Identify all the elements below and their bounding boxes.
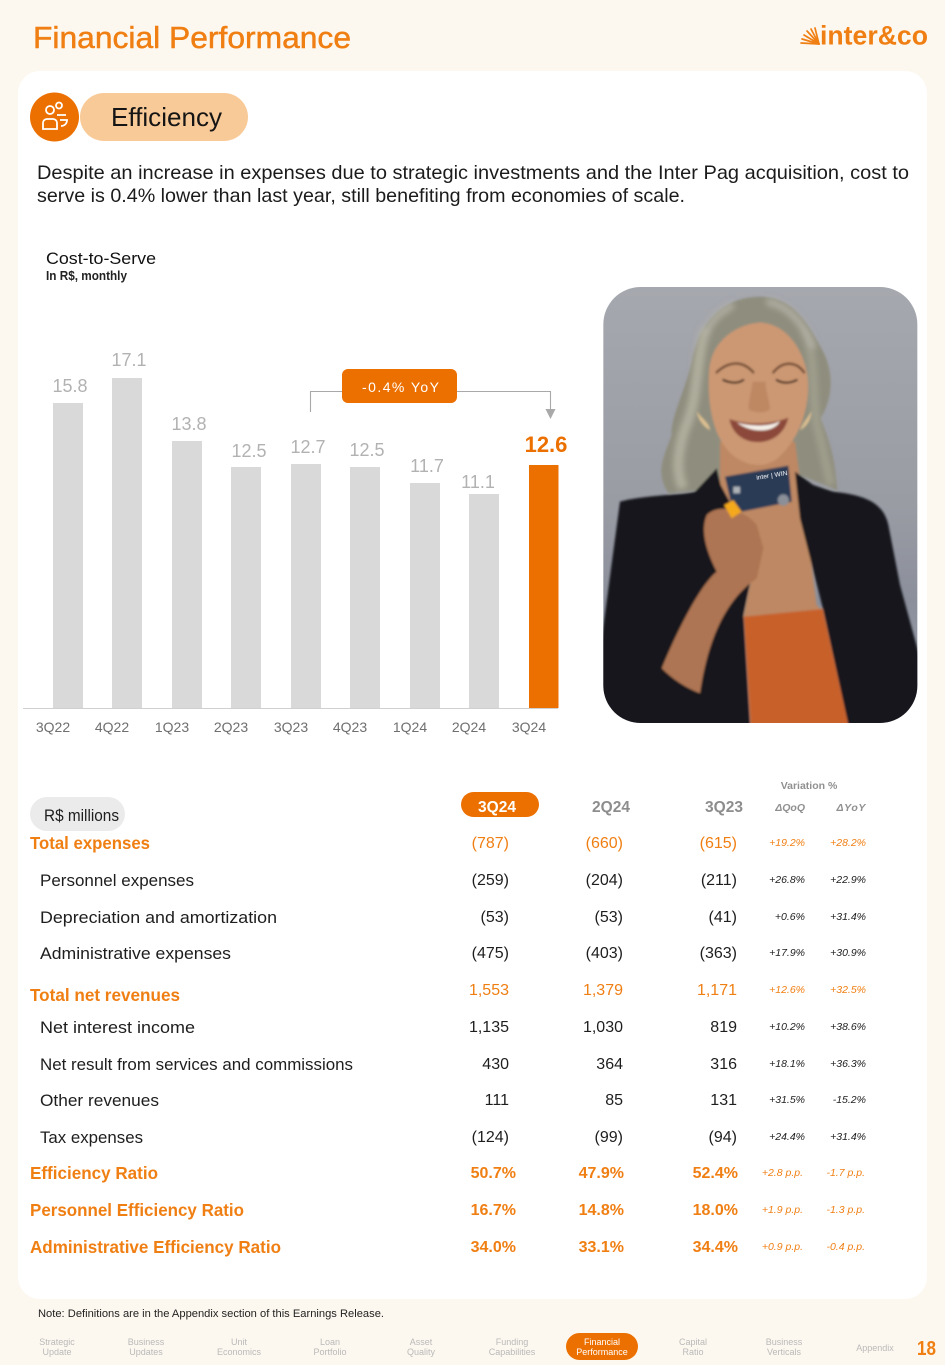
table: financial rows: Other revenues [40, 1091, 159, 1110]
table: financial rows: (363) [700, 945, 737, 962]
intro text: serve is 0.4% lower than last year, still benefiting from economies of scale. [37, 185, 685, 207]
table: financial rows: 1,553 [469, 982, 509, 999]
bar chart: cost to serve: 2Q24 [452, 719, 486, 735]
table: financial rows: (53) [595, 909, 623, 926]
table: financial rows: (660) [586, 835, 623, 852]
table: financial rows: (403) [586, 945, 623, 962]
table: financial rows: +2.8 p.p. [762, 1167, 803, 1179]
table: financial rows: (41) [709, 909, 737, 926]
section pill: Efficiency: Efficiency [111, 102, 222, 132]
bar chart: cost to serve: 3Q22 [36, 719, 70, 735]
table: financial rows: 50.7% [471, 1165, 516, 1182]
bar chart: cost to serve: 3Q24 [512, 719, 546, 735]
navigation bar: Funding [496, 1337, 528, 1347]
intro text: Despite an increase in expenses due to strategic investments and the Inter Pag acquisition, cost to [37, 162, 909, 184]
bar chart: cost to serve: 17.1 [111, 350, 147, 370]
logo: inter&co: inter&co [820, 20, 928, 50]
navigation bar: Updates [129, 1347, 163, 1357]
table header: ΔYoY [836, 802, 866, 814]
table: financial rows: +22.9% [830, 874, 866, 886]
table: financial rows: Administrative expenses [40, 944, 231, 963]
table: financial rows: (124) [472, 1129, 509, 1146]
chart heading: Cost-to-Serve [46, 249, 156, 268]
callout: -0.4% YoY: -0.4% YoY [362, 379, 440, 395]
navigation bar: Capital [679, 1337, 707, 1347]
table: financial rows: Personnel expenses [40, 871, 194, 890]
bar chart: cost to serve [23, 350, 567, 735]
table: financial rows: 47.9% [579, 1165, 624, 1182]
table header: ΔQoQ [774, 802, 805, 814]
table: financial rows: 1,379 [583, 982, 623, 999]
title: Financial Performance [33, 20, 351, 55]
table header: 3Q23 [705, 799, 743, 816]
bar chart: cost to serve: 12.7 [290, 437, 326, 457]
arrow: YoY comparison [310, 392, 556, 419]
table: financial rows: 33.1% [579, 1239, 624, 1256]
navigation bar: Economics [217, 1347, 262, 1357]
chart heading [46, 249, 156, 283]
table: financial rows: Administrative Efficiency Ratio [30, 1237, 281, 1257]
table header: Variation % [781, 780, 838, 792]
table: financial rows: +30.9% [830, 947, 866, 959]
table: financial rows: +10.2% [769, 1021, 805, 1033]
table: financial rows: (787) [472, 835, 509, 852]
table: financial rows: (475) [472, 945, 509, 962]
table: financial rows: +1.9 p.p. [762, 1204, 803, 1216]
table: financial rows: 1,171 [697, 982, 737, 999]
table: financial rows: (259) [472, 872, 509, 889]
navigation bar: Performance [576, 1347, 628, 1357]
table: financial rows: +24.4% [769, 1131, 805, 1143]
label pill: R$ millions: R$ millions [44, 806, 119, 825]
table: financial rows: 14.8% [579, 1202, 624, 1219]
table: financial rows: Net result from services and commissions [40, 1055, 353, 1074]
table: financial rows: 34.0% [471, 1239, 516, 1256]
table: financial rows: +0.6% [775, 911, 805, 923]
table: financial rows: 1,135 [469, 1019, 509, 1036]
table: financial rows: Personnel Efficiency Ratio [30, 1200, 244, 1220]
intro text [37, 162, 909, 207]
table: financial rows: 34.4% [693, 1239, 738, 1256]
table: financial rows: Tax expenses [40, 1128, 143, 1147]
table: financial rows [30, 833, 866, 1257]
table: financial rows: 1,030 [583, 1019, 623, 1036]
navigation bar [39, 1333, 894, 1360]
table: financial rows: -1.7 p.p. [826, 1167, 865, 1179]
table: financial rows: (94) [709, 1129, 737, 1146]
table: financial rows: (211) [701, 872, 737, 889]
table: financial rows: (53) [481, 909, 509, 926]
table header: 2Q24 [592, 799, 630, 816]
table: financial rows: +38.6% [830, 1021, 866, 1033]
chart heading: In R$, monthly [46, 269, 127, 283]
table header [30, 780, 866, 831]
bar chart: cost to serve: 15.8 [52, 376, 88, 396]
bar chart: cost to serve: 12.5 [231, 441, 267, 461]
table: financial rows: 52.4% [693, 1165, 738, 1182]
table: financial rows: +31.4% [830, 911, 866, 923]
bar chart: cost to serve: 1Q23 [155, 719, 189, 735]
table: financial rows: +0.9 p.p. [762, 1241, 803, 1253]
navigation bar: Verticals [767, 1347, 802, 1357]
table: financial rows: +32.5% [830, 984, 866, 996]
navigation bar: Asset [410, 1337, 433, 1347]
table: financial rows: Depreciation and amortization [40, 908, 277, 927]
navigation bar: Appendix [856, 1343, 894, 1353]
table: financial rows: +28.2% [830, 837, 866, 849]
bar chart: cost to serve: 13.8 [171, 414, 207, 434]
table: financial rows: +26.8% [769, 874, 805, 886]
table: financial rows: +17.9% [769, 947, 805, 959]
bar chart: cost to serve: 1Q24 [393, 719, 427, 735]
label pill: R$ millions [30, 797, 125, 831]
navigation bar: Business [128, 1337, 165, 1347]
table: financial rows: (204) [586, 872, 623, 889]
bar chart: cost to serve: 11.1 [461, 472, 495, 492]
photo: smiling woman holding a card [603, 287, 918, 723]
bar chart: cost to serve: 12.5 [349, 440, 385, 460]
navigation bar: Quality [407, 1347, 436, 1357]
table: financial rows: 316 [710, 1056, 737, 1073]
table: financial rows: (99) [595, 1129, 623, 1146]
table: financial rows: Total net revenues [30, 985, 180, 1005]
table: financial rows: (615) [700, 835, 737, 852]
table: financial rows: -1.3 p.p. [826, 1204, 865, 1216]
icon: people [30, 92, 79, 142]
bar chart: cost to serve: 2Q23 [214, 719, 248, 735]
table: financial rows: 131 [710, 1092, 737, 1109]
navigation bar: Unit [231, 1337, 247, 1347]
navigation bar: Loan [320, 1337, 340, 1347]
page number: 18 [917, 1338, 936, 1360]
table: financial rows: +31.4% [830, 1131, 866, 1143]
table: financial rows: Total expenses [30, 833, 150, 853]
table: financial rows: 85 [605, 1092, 623, 1109]
section pill: Efficiency [80, 93, 248, 141]
bar chart: cost to serve: 11.7 [410, 456, 444, 476]
table: financial rows: +12.6% [769, 984, 805, 996]
bar chart: cost to serve: 4Q23 [333, 719, 367, 735]
navigation bar: Business [766, 1337, 803, 1347]
table: financial rows: +31.5% [769, 1094, 805, 1106]
table: financial rows: 364 [596, 1056, 623, 1073]
navigation bar: Update [42, 1347, 72, 1357]
table: financial rows: 18.0% [693, 1202, 738, 1219]
table: financial rows: +18.1% [769, 1058, 805, 1070]
bar chart: cost to serve: 12.6 [525, 432, 567, 457]
table: financial rows: +19.2% [769, 837, 805, 849]
table: financial rows: 430 [482, 1056, 509, 1073]
table: financial rows: 16.7% [471, 1202, 516, 1219]
navigation bar: Capabilities [489, 1347, 536, 1357]
table: financial rows: 819 [710, 1019, 737, 1036]
table: financial rows: -15.2% [833, 1094, 866, 1106]
card text: inter | WIN [756, 470, 788, 482]
table: financial rows: Efficiency Ratio [30, 1163, 158, 1183]
navigation bar: Strategic [39, 1337, 75, 1347]
navigation bar: Ratio [682, 1347, 704, 1357]
table: financial rows: Net interest income [40, 1018, 195, 1037]
table: financial rows: -0.4 p.p. [826, 1241, 865, 1253]
navigation bar: Portfolio [313, 1347, 347, 1357]
table: financial rows: 111 [485, 1092, 509, 1109]
column: 3Q24 highlighted [461, 792, 539, 817]
column: 3Q24 highlighted: 3Q24 [478, 799, 516, 816]
footnote: Note: Definitions are in the Appendix section of this Earnings Release. [38, 1308, 384, 1320]
bar chart: cost to serve: 4Q22 [95, 719, 129, 735]
bar chart: cost to serve: 3Q23 [274, 719, 308, 735]
navigation bar: Financial [584, 1337, 620, 1347]
table: financial rows: +36.3% [830, 1058, 866, 1070]
callout: -0.4% YoY [342, 369, 457, 403]
